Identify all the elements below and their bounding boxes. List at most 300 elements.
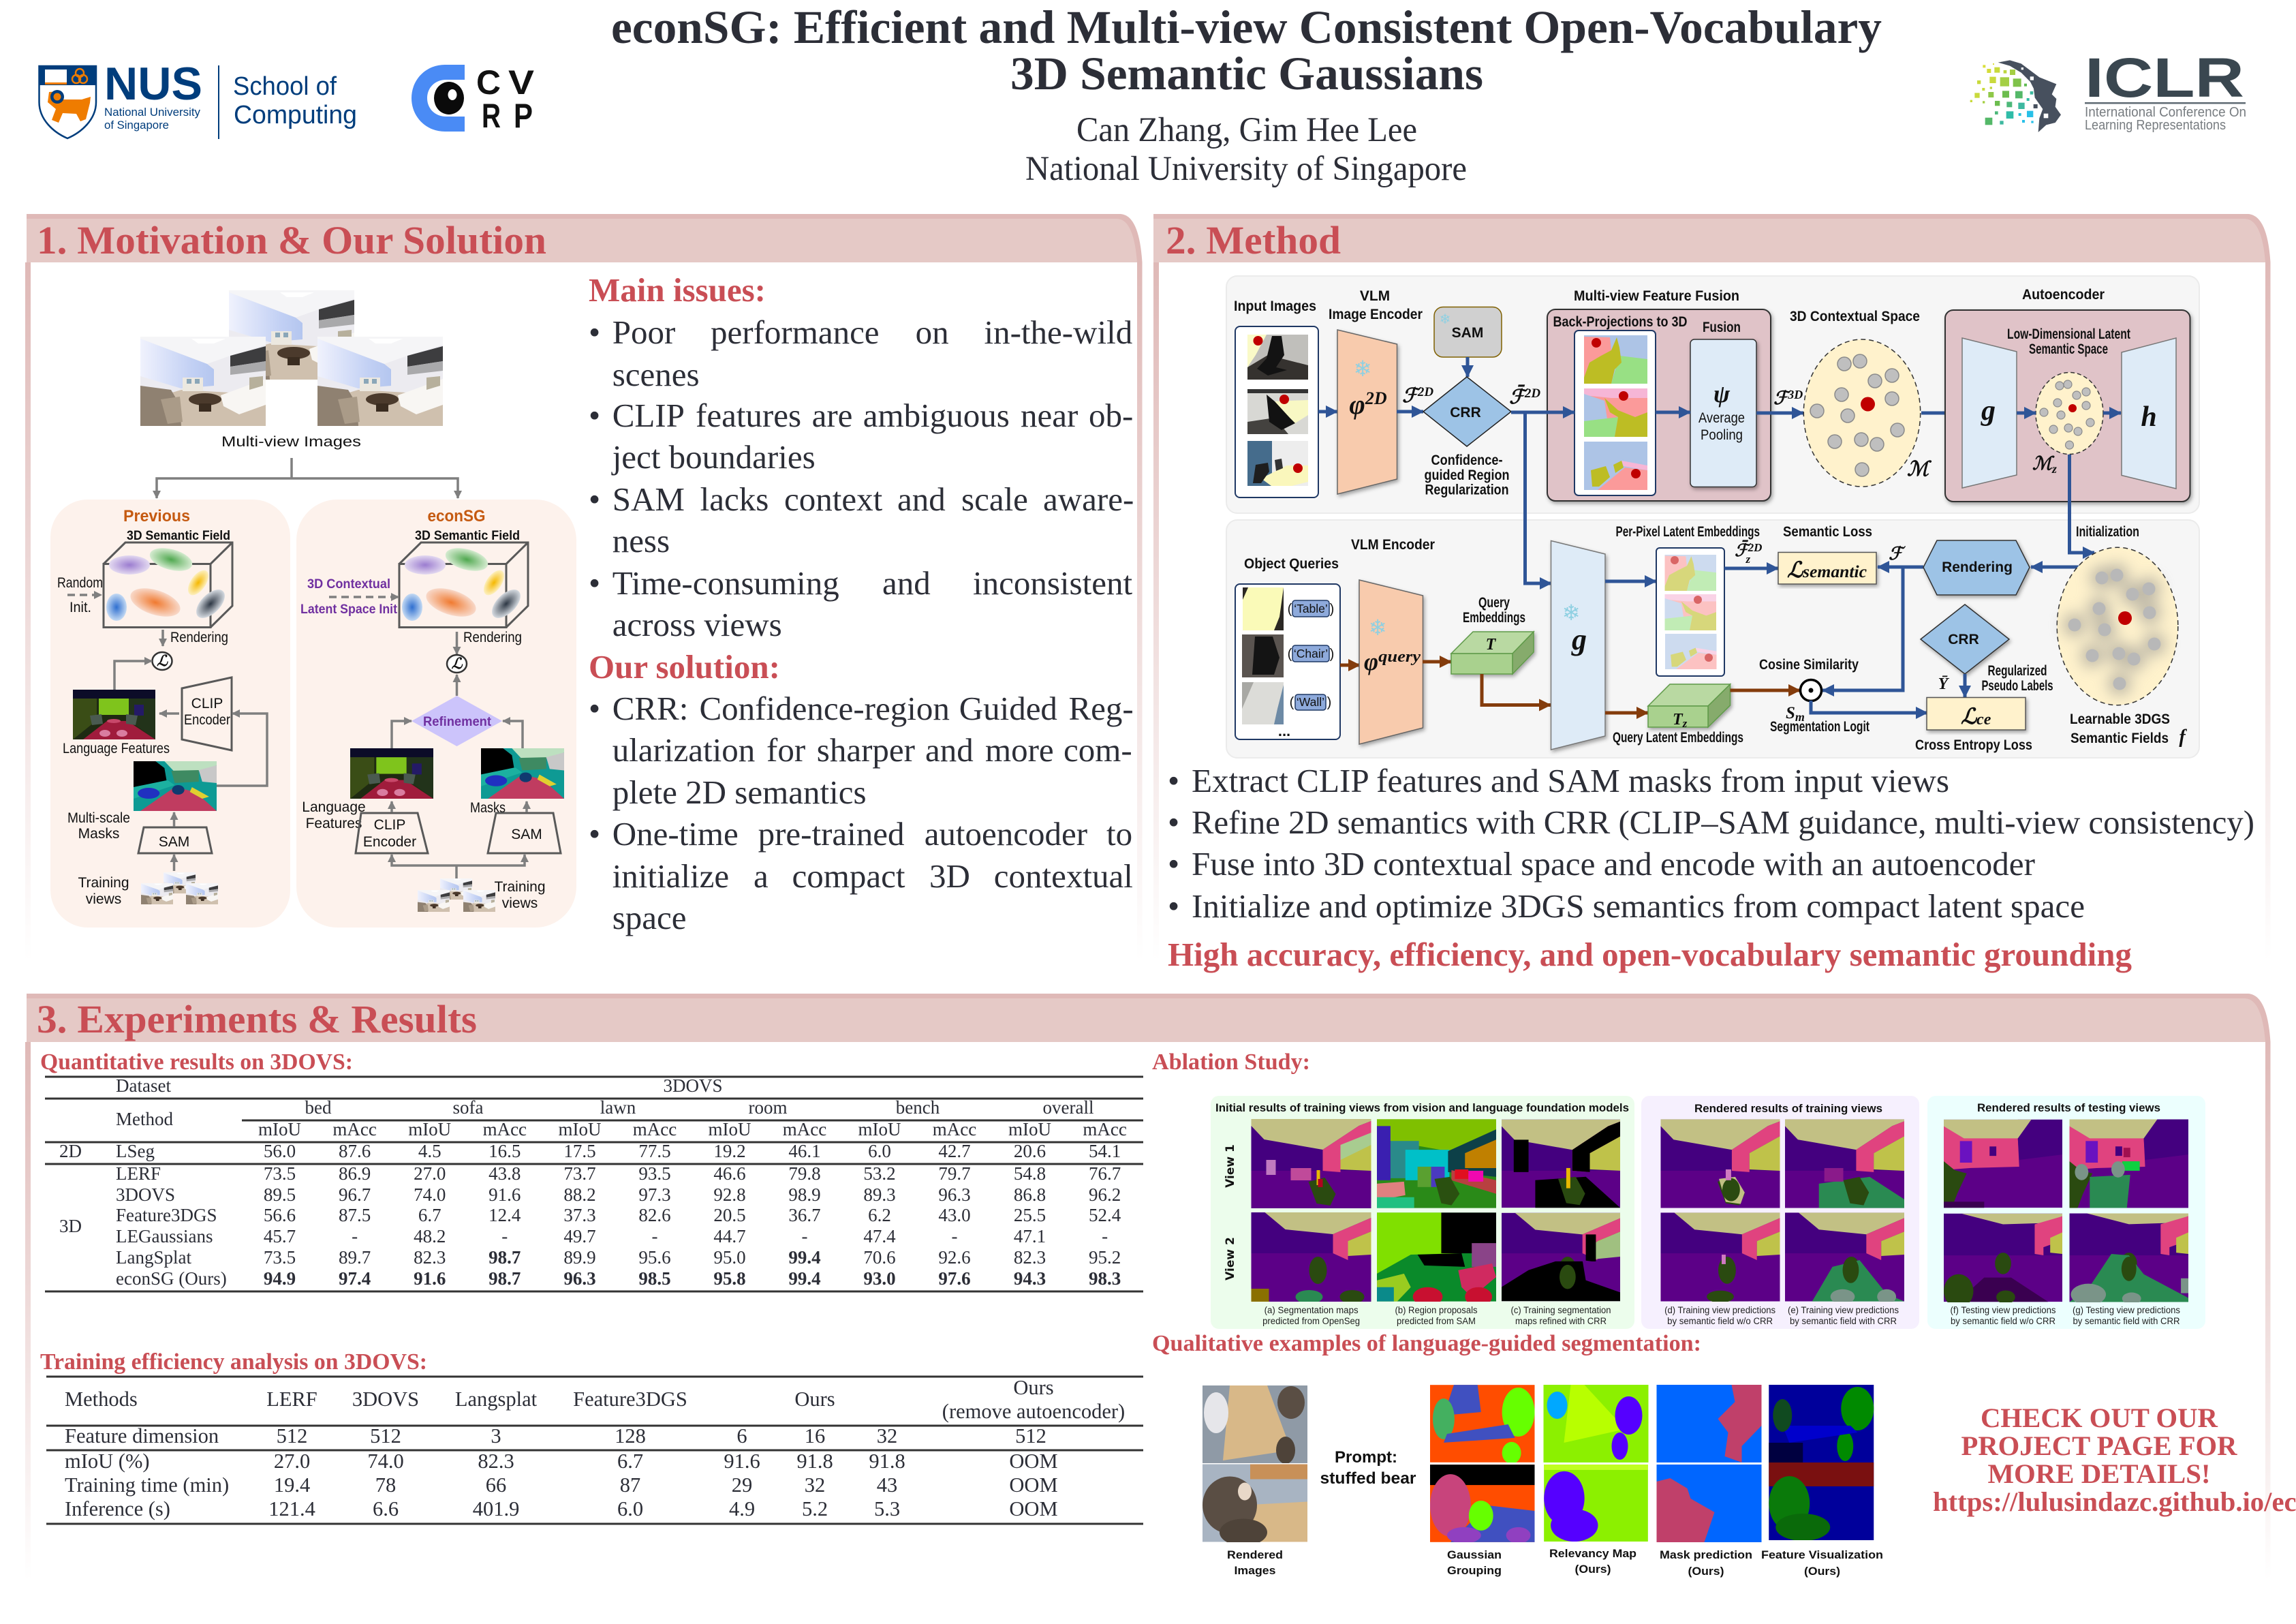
method diagram: semantic pre-processing row: Multi-view Feature Fusion	[1574, 288, 1739, 304]
per-pixel latent embeddings	[1656, 548, 1724, 676]
table: training efficiency: 6.7	[617, 1450, 643, 1473]
text block: main issues and our solution: contextual	[994, 857, 1133, 895]
table: quantitative results: 46.1	[788, 1141, 821, 1161]
table: quantitative results: 49.7	[563, 1226, 596, 1246]
text block: main issues and our solution: for	[766, 731, 805, 769]
text: prompt: stuffed bear	[1320, 1469, 1416, 1488]
method diagram: semantic pre-processing row: 2D	[1417, 385, 1433, 399]
table: training efficiency: Feature dimension	[65, 1424, 219, 1447]
table: quantitative results: 43.0	[938, 1205, 971, 1225]
text block: main issues and our solution: and	[925, 731, 974, 769]
table: quantitative results: sofa	[453, 1097, 484, 1118]
text block: main issues and our solution: SAM	[612, 480, 685, 518]
table: quantitative results: mIoU	[408, 1119, 451, 1139]
image: training with CRR view 2	[1785, 1212, 1904, 1302]
panel: econSG pipeline: Training	[494, 879, 546, 895]
image: SAM view 2	[1377, 1212, 1496, 1302]
autoencoder panel: z	[2051, 462, 2057, 476]
input images	[1235, 326, 1318, 497]
image: Gaussian grouping	[1430, 1385, 1534, 1544]
query embeddings cuboid	[1451, 632, 1534, 674]
table: quantitative results: LangSplat	[116, 1247, 191, 1268]
text block: main issues and our solution: •	[589, 564, 600, 602]
panel: econSG pipeline: Refinement	[423, 715, 492, 729]
method diagram: training row: 2D	[1748, 541, 1762, 554]
text block: main issues and our solution: sharper	[817, 731, 915, 769]
table: quantitative results: -	[951, 1226, 958, 1246]
table: quantitative results: LEGaussians	[116, 1226, 213, 1246]
image: feature visualization	[1769, 1385, 1874, 1541]
text block: main issues and our solution: performance	[711, 313, 880, 351]
image: testing w/o CRR view 1	[1944, 1119, 2062, 1208]
method diagram: semantic pre-processing row: Autoencoder	[2022, 287, 2105, 303]
panel: rendered testing views: Rendered results of testing views	[1977, 1102, 2160, 1114]
object queries: )	[1327, 695, 1331, 710]
multi-view fusion panel	[1547, 309, 1771, 501]
panel: rendered training views: Rendered results of training views	[1694, 1103, 1882, 1115]
multi-view fusion panel: Back-Projections to 3D	[1553, 314, 1687, 330]
table: training efficiency: 5.3	[874, 1497, 900, 1520]
table: training efficiency: 43	[877, 1473, 897, 1497]
panel: Previous pipeline: Masks	[78, 826, 119, 842]
method diagram: semantic pre-processing row: ℱ̄	[1509, 386, 1525, 408]
method diagram: training row: S	[1786, 704, 1795, 722]
table: training efficiency: 27.0	[274, 1450, 310, 1473]
text block: main issues and our solution: more	[985, 731, 1054, 769]
captions: Mask prediction	[1660, 1548, 1752, 1561]
logo: NUS School of Computing	[40, 58, 357, 139]
table: quantitative results: 86.9	[339, 1163, 371, 1184]
method diagram: semantic pre-processing row	[1226, 276, 2199, 513]
multi-view images	[140, 290, 443, 450]
object queries: (	[1288, 647, 1292, 662]
3D contextual space ellipse	[1803, 339, 1932, 487]
table: training efficiency: Training time (min)	[65, 1473, 229, 1497]
3D semantic field box	[104, 542, 232, 627]
text block: main issues and our solution: ness	[612, 522, 670, 560]
table: quantitative results: 99.4	[788, 1268, 821, 1289]
table: training efficiency: 5.2	[802, 1497, 828, 1520]
table: training efficiency: 3	[491, 1424, 501, 1447]
table: training efficiency: 87	[620, 1473, 640, 1497]
logo: CVPR	[412, 63, 535, 135]
method diagram: semantic pre-processing row: Image Encoder	[1329, 307, 1423, 322]
method diagram: training row: Cosine Similarity	[1759, 657, 1859, 673]
image: CRR view 2	[1502, 1213, 1620, 1302]
table: quantitative results: 6.2	[868, 1205, 891, 1225]
image: relevancy map	[1544, 1385, 1649, 1542]
text block: main issues and our solution	[589, 271, 1134, 936]
logo: ICLR	[1970, 47, 2246, 133]
captions: Images	[1235, 1564, 1275, 1577]
image encoder: ❄	[1354, 356, 1371, 382]
table: quantitative results: 54.1	[1089, 1141, 1121, 1161]
table: quantitative results: 95.2	[1089, 1247, 1121, 1268]
table: quantitative results: mIoU	[709, 1119, 751, 1139]
object queries: ‘Table’	[1294, 602, 1328, 615]
table: quantitative results: overall	[1043, 1097, 1093, 1118]
panel: Motivation & Our Solution	[25, 214, 1142, 961]
method diagram: training row: Ȳ	[1938, 675, 1950, 693]
table: quantitative results: 93.0	[863, 1268, 896, 1289]
table: quantitative results: 89.7	[339, 1247, 371, 1268]
text block: method bullets: Initialize and optimize 3DGS semantics from compact latent space	[1192, 887, 2085, 925]
table: quantitative results: 89.5	[264, 1184, 296, 1205]
callout: project page: CHECK OUT OUR	[1981, 1403, 2218, 1433]
rendering hexagon	[1923, 540, 2030, 595]
panel: rendered training views	[1641, 1096, 1919, 1329]
image: training w/o CRR view 1	[1661, 1119, 1780, 1208]
panel: initial results: View 2	[1224, 1237, 1237, 1281]
cross entropy loss box: ce	[1976, 711, 1991, 729]
panel: Previous pipeline: Random	[57, 575, 103, 591]
text block: main issues and our solution: near	[1021, 397, 1078, 434]
authors: Can Zhang, Gim Hee Lee	[1076, 110, 1417, 149]
text block: main issues and our solution: 3D	[929, 857, 970, 895]
3D semantic field box	[399, 542, 528, 627]
method diagram: training row: z	[1745, 553, 1750, 566]
autoencoder panel	[1945, 310, 2190, 502]
text block: main issues and our solution: Time-consuming	[612, 564, 839, 602]
logo: CVPR: C	[476, 63, 501, 102]
3D contextual space ellipse: ℳ	[1907, 458, 1932, 480]
text block: main issues and our solution: autoencoder	[925, 815, 1087, 853]
title: 3D Semantic Gaussians	[1010, 48, 1483, 99]
table: training efficiency: 512	[1015, 1424, 1046, 1447]
panel: initial results: Initial results of training views from vision and language foundation models	[1215, 1102, 1629, 1114]
image: testing w/o CRR view 2	[1944, 1213, 2062, 1302]
cosine similarity dot operator	[1800, 680, 1822, 701]
text block: main issues and our solution: ject boundaries	[611, 438, 816, 476]
method diagram: training row	[1226, 412, 2199, 758]
table: training efficiency: 512	[370, 1424, 401, 1447]
table: quantitative results: 43.8	[488, 1163, 521, 1184]
text block: method bullets: •	[1168, 845, 1179, 883]
table: quantitative results: 97.4	[339, 1268, 371, 1289]
table: quantitative results: 93.5	[638, 1163, 671, 1184]
rendering hexagon: Rendering	[1942, 560, 2013, 575]
table: quantitative results: LERF	[116, 1163, 161, 1184]
table: training efficiency: 128	[615, 1424, 646, 1447]
table: training efficiency: mIoU (%)	[65, 1450, 150, 1473]
text block: main issues and our solution: space	[612, 899, 687, 936]
method diagram: training row: f	[2179, 726, 2187, 748]
table: quantitative results: 16.5	[488, 1141, 521, 1161]
table: quantitative results: 6.0	[868, 1141, 891, 1161]
table: quantitative results: 47.1	[1014, 1226, 1046, 1246]
panel: Previous pipeline: Encoder	[184, 712, 230, 728]
method diagram: training row: Query	[1478, 595, 1510, 611]
table: training efficiency: OOM	[1009, 1450, 1058, 1473]
arrows: split to previous and econSG	[157, 458, 458, 498]
table: training efficiency: 74.0	[367, 1450, 404, 1473]
panel: initial results: (a) Segmentation maps	[1265, 1305, 1359, 1315]
CRR diamond	[1423, 377, 1511, 446]
text block: main issues and our solution: lacks	[700, 480, 769, 518]
text block: main issues and our solution: and	[897, 480, 946, 518]
heading: section 2: 2. Method	[1166, 218, 1341, 262]
text block: main issues and our solution: One-time	[612, 815, 739, 853]
text block: main issues and our solution: inconsistent	[973, 564, 1132, 602]
panel: econSG pipeline: views	[502, 895, 538, 911]
text block: main issues and our solution: on	[916, 313, 949, 351]
object queries	[1235, 584, 1340, 739]
image: testing with CRR view 2	[2070, 1213, 2188, 1302]
table: quantitative results	[45, 1075, 1143, 1291]
table: quantitative results: 91.6	[414, 1268, 446, 1289]
text block: main issues and our solution: compact	[792, 857, 905, 895]
image: mask prediction	[1657, 1385, 1762, 1542]
table: quantitative results: 98.9	[788, 1184, 821, 1205]
panel: econSG pipeline: 3D Semantic Field	[415, 529, 520, 543]
object queries: )	[1330, 647, 1334, 662]
heading: section 1: 1. Motivation & Our Solution	[37, 218, 546, 262]
method diagram: semantic pre-processing row: 3D	[1787, 388, 1803, 401]
table: quantitative results: Method	[116, 1109, 173, 1129]
table: quantitative results: 92.8	[713, 1184, 746, 1205]
text block: method bullets: Refine 2D semantics with CRR (CLIP–SAM guidance, multi-view consistency)	[1192, 803, 2254, 841]
query latent embeddings cuboid	[1648, 684, 1731, 730]
captions: (Ours)	[1688, 1565, 1724, 1578]
query encoder: query	[1378, 648, 1421, 666]
text: prompt: Prompt:	[1335, 1448, 1397, 1467]
method diagram: semantic pre-processing row: guided Region	[1424, 468, 1510, 483]
text block: main issues and our solution: in-the-wild	[984, 313, 1132, 351]
text block: main issues and our solution: across views	[612, 606, 782, 643]
logo: ICLR: Learning Representations	[2085, 118, 2226, 133]
table: quantitative results: 98.3	[1089, 1268, 1121, 1289]
table: training efficiency: 78	[375, 1473, 396, 1497]
table: quantitative results: lawn	[600, 1097, 636, 1118]
table: quantitative results: mAcc	[332, 1119, 377, 1139]
table: training efficiency: (remove autoencoder)	[942, 1400, 1125, 1423]
table: quantitative results: 73.5	[264, 1163, 296, 1184]
method diagram: semantic pre-processing row: Regularization	[1425, 482, 1508, 497]
table: quantitative results: 36.7	[788, 1205, 821, 1225]
panel: Previous pipeline: SAM	[159, 834, 189, 850]
table: quantitative results: 89.3	[863, 1184, 896, 1205]
panel: initial results	[1211, 1096, 1634, 1329]
affiliation: National University of Singapore	[1025, 149, 1467, 187]
table: quantitative results: 25.5	[1014, 1205, 1046, 1225]
method diagram: training row: Learnable 3DGS	[2070, 711, 2170, 727]
callout: key takeaway: High accuracy, efficiency, and open-vocabulary semantic grounding	[1168, 936, 2132, 973]
cross entropy loss box: ℒ	[1961, 704, 1976, 729]
text block: main issues and our solution: pre-trained	[758, 815, 905, 853]
panel: Previous pipeline	[50, 500, 290, 928]
object queries: ‘Wall’	[1297, 695, 1324, 709]
panel: rendered training views: by semantic field w/o CRR	[1667, 1316, 1773, 1326]
logo: CVPR: R	[482, 97, 501, 135]
table: training efficiency: Ours	[1013, 1376, 1054, 1399]
panel: econSG pipeline: CLIP	[374, 817, 405, 833]
panel: econSG pipeline: Features	[306, 816, 362, 831]
table: quantitative results: 87.5	[339, 1205, 371, 1225]
method diagram: training row: Per-Pixel Latent Embeddings	[1616, 524, 1760, 540]
semantic loss box	[1778, 552, 1876, 584]
method diagram: training row: Segmentation Logit	[1770, 719, 1870, 735]
table: quantitative results: 98.7	[488, 1268, 521, 1289]
figure: language-guided segmentation	[1203, 1385, 1883, 1578]
table: quantitative results: mIoU	[858, 1119, 901, 1139]
object queries: (	[1290, 695, 1294, 710]
table: training efficiency: Inference (s)	[65, 1497, 170, 1520]
table: quantitative results: 82.3	[414, 1247, 446, 1268]
panel: econSG pipeline: ℒ	[452, 655, 463, 672]
captions: Feature Visualization	[1761, 1548, 1883, 1561]
table: quantitative results: -	[352, 1226, 358, 1246]
table: quantitative results: 2D	[59, 1141, 82, 1161]
captions	[1227, 1547, 1883, 1578]
table: training efficiency: LERF	[266, 1388, 317, 1411]
image encoder: 2D	[1365, 388, 1387, 408]
panel: rendered testing views: by semantic field w/o CRR	[1951, 1316, 2055, 1326]
table: quantitative results: 3DOVS	[663, 1075, 723, 1096]
text block: main issues and our solution: aware-	[1043, 480, 1134, 518]
text block: main issues and our solution: Reg-	[1068, 690, 1134, 727]
learnable 3DGS ellipse	[2057, 547, 2178, 705]
heading: section 3: 3. Experiments & Results	[37, 997, 477, 1041]
autoencoder panel: ℳ	[2032, 453, 2052, 474]
latent encoder g: g	[1571, 623, 1587, 656]
table: quantitative results: 82.3	[1014, 1247, 1046, 1268]
table: quantitative results: 95.8	[713, 1268, 746, 1289]
table: quantitative results: Feature3DGS	[116, 1205, 217, 1225]
panel: econSG pipeline: Latent Space Init	[300, 602, 398, 617]
table: quantitative results: 46.6	[713, 1163, 746, 1184]
panel: rendered testing views: by semantic field with CRR	[2073, 1316, 2180, 1326]
text block: main issues and our solution: a	[754, 857, 769, 895]
table: quantitative results: 27.0	[414, 1163, 446, 1184]
title: econSG: Efficient and Multi-view Consistent Open-Vocabulary	[611, 1, 1882, 53]
table: training efficiency: 4.9	[729, 1497, 755, 1520]
text block: method bullets	[1168, 762, 2254, 925]
text block: main issues and our solution: ambiguous	[863, 397, 1010, 434]
query latent embeddings cuboid: T	[1673, 711, 1683, 729]
object queries: (	[1288, 602, 1292, 617]
text: prompt	[1320, 1448, 1416, 1488]
table: training efficiency: 6.0	[617, 1497, 643, 1520]
SAM box: SAM	[1452, 325, 1483, 341]
text block: main issues and our solution: are	[812, 397, 852, 434]
autoencoder panel: h	[2141, 401, 2157, 433]
SAM box: ❄	[1440, 311, 1450, 327]
autoencoder panel: Semantic Space	[2029, 341, 2108, 357]
table: training efficiency: 3DOVS	[352, 1388, 419, 1411]
table: quantitative results: room	[748, 1097, 788, 1118]
panel: Previous pipeline: Language Features	[63, 741, 170, 756]
table: quantitative results: 94.3	[1014, 1268, 1046, 1289]
text block: main issues and our solution: features	[696, 397, 801, 434]
panel: rendered training views: (d) Training view predictions	[1664, 1305, 1775, 1315]
table: quantitative results: mIoU	[1008, 1119, 1051, 1139]
panel: econSG pipeline: 3D Contextual	[307, 577, 390, 592]
panel: Previous pipeline: Previous	[123, 507, 190, 525]
table: quantitative results: 20.5	[713, 1205, 746, 1225]
table: quantitative results: -	[801, 1226, 808, 1246]
table: quantitative results: 3D	[59, 1216, 82, 1236]
table: quantitative results: 12.4	[488, 1205, 521, 1225]
table: quantitative results: 96.3	[938, 1184, 971, 1205]
table: quantitative results: 37.3	[563, 1205, 596, 1225]
table: quantitative results: 99.4	[788, 1247, 821, 1268]
logo: NUS School of Computing: Computing	[234, 101, 357, 129]
logo: NUS School of Computing: School of	[233, 72, 337, 101]
text block: main issues and our solution: •	[589, 815, 600, 853]
table: quantitative results: 95.0	[713, 1247, 746, 1268]
table: quantitative results: 45.7	[264, 1226, 296, 1246]
CRR small diamond: CRR	[1948, 632, 1979, 647]
panel: econSG pipeline	[296, 500, 576, 928]
panel: rendered testing views: (g) Testing view predictions	[2073, 1305, 2180, 1315]
method diagram: semantic pre-processing row: Input Images	[1234, 298, 1316, 314]
panel: Previous pipeline: Training	[78, 875, 129, 891]
method diagram: training row: Semantic Fields	[2070, 731, 2169, 746]
panel: Previous pipeline: views	[86, 891, 121, 907]
table: training efficiency: 91.8	[796, 1450, 833, 1473]
multi-view fusion panel: Average	[1698, 410, 1745, 426]
table: quantitative results: -	[651, 1226, 658, 1246]
object queries: ‘Chair’	[1294, 647, 1328, 660]
text block: main issues and our solution: scale	[961, 480, 1028, 518]
text block: main issues and our solution: •	[589, 397, 600, 434]
panel: econSG pipeline: Language	[302, 799, 366, 815]
table: quantitative results: 54.8	[1014, 1163, 1046, 1184]
table: quantitative results: 42.7	[938, 1141, 971, 1161]
table: quantitative results: 94.9	[264, 1268, 296, 1289]
table: quantitative results: 44.7	[713, 1226, 746, 1246]
image encoder: φ	[1349, 389, 1365, 420]
table: training efficiency: Methods	[65, 1388, 138, 1411]
text block: method bullets: •	[1168, 887, 1179, 925]
table: quantitative results: 56.6	[264, 1205, 296, 1225]
multi-view fusion panel: Pooling	[1701, 427, 1743, 443]
table: quantitative results: 79.8	[788, 1163, 821, 1184]
multi-view images: Multi-view Images	[221, 434, 361, 450]
method diagram: training row: Pseudo Labels	[1981, 678, 2053, 694]
method diagram: training row: Embeddings	[1463, 610, 1525, 626]
table: quantitative results: 47.4	[863, 1226, 896, 1246]
table: quantitative results: 74.0	[414, 1184, 446, 1205]
table: training efficiency: OOM	[1009, 1473, 1058, 1497]
table: quantitative results: 76.7	[1089, 1163, 1121, 1184]
callout: project page: PROJECT PAGE FOR	[1961, 1430, 2237, 1461]
table: quantitative results: mIoU	[258, 1119, 301, 1139]
heading: quantitative results: Quantitative results on 3DOVS:	[40, 1050, 353, 1075]
panel: initial results: (c) Training segmentation	[1511, 1305, 1611, 1315]
table: quantitative results: -	[1102, 1226, 1108, 1246]
text block: main issues and our solution: ob-	[1089, 397, 1133, 434]
method diagram: training row: m	[1795, 710, 1805, 724]
table: quantitative results: 82.6	[638, 1205, 671, 1225]
object queries: )	[1330, 602, 1334, 617]
panel: rendered testing views	[1927, 1096, 2205, 1329]
panel: econSG pipeline: SAM	[511, 827, 542, 842]
table: training efficiency: 32	[877, 1424, 897, 1447]
CRR small diamond	[1921, 604, 2009, 674]
table: quantitative results: bed	[305, 1097, 332, 1118]
text block: main issues and our solution: Confidence-region	[699, 690, 950, 727]
table: quantitative results: mAcc	[1083, 1119, 1127, 1139]
captions: (Ours)	[1575, 1563, 1611, 1576]
table: quantitative results: 3DOVS	[116, 1184, 175, 1205]
panel: Experiments & Results	[25, 994, 2270, 1580]
table: quantitative results: bench	[896, 1097, 940, 1118]
cross entropy loss box	[1927, 698, 2026, 730]
table: quantitative results: 98.5	[638, 1268, 671, 1289]
table: training efficiency: Ours	[794, 1388, 835, 1411]
table: quantitative results: 96.2	[1089, 1184, 1121, 1205]
